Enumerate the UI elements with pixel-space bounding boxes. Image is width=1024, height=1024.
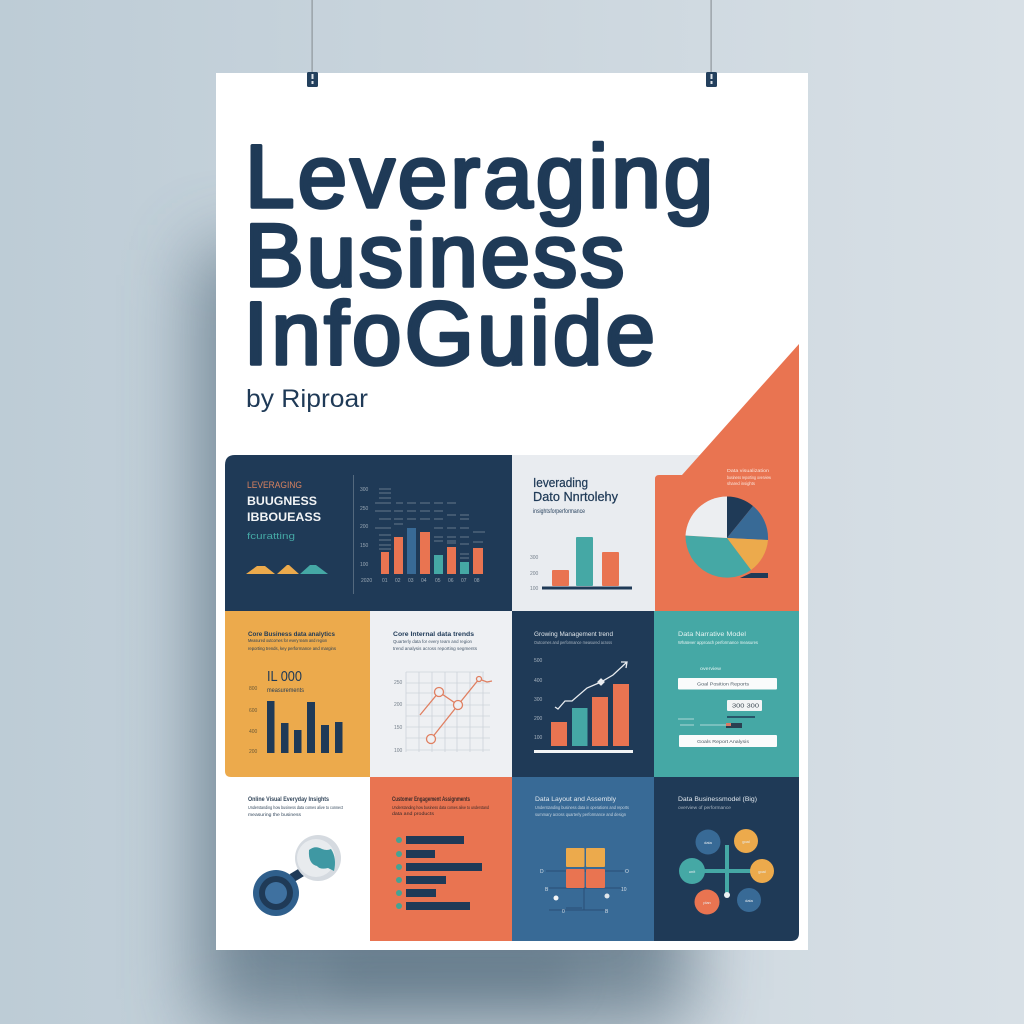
- panel text: [535, 797, 630, 817]
- panel text: reporting trends, key performance and margins: [248, 646, 337, 651]
- matrix diagram: B: [545, 887, 549, 893]
- panel text: [248, 632, 337, 651]
- hub diagram: plan: [703, 900, 711, 905]
- hub diagram: goal: [742, 839, 750, 844]
- input bars: 300 300: [732, 704, 759, 710]
- bar chart: [534, 658, 633, 753]
- bar chart: 400: [249, 729, 258, 735]
- bar chart: 300: [534, 697, 543, 703]
- panel text: [393, 632, 478, 651]
- matrix diagram: 10: [621, 887, 627, 893]
- input bars: [678, 678, 777, 747]
- panel text: Whatever approach performance measures: [678, 640, 759, 645]
- pie caption: [727, 468, 772, 486]
- title: Leveraging: [245, 126, 716, 226]
- magnifier icon: [253, 835, 341, 916]
- panel text: Data Narrative Model: [678, 632, 746, 638]
- bar chart: 400: [534, 678, 543, 684]
- hanging clips: [307, 0, 717, 87]
- matrix diagram: 0: [562, 909, 565, 915]
- panel text: summary across quarterly performance and design: [535, 812, 626, 817]
- panel text: Outcomes and performance measured across: [534, 640, 613, 645]
- bar chart: 03: [408, 578, 414, 584]
- bar chart: 300: [360, 487, 369, 493]
- panel: orange list: [370, 777, 512, 941]
- input bars: Goal Position Reports: [697, 682, 750, 686]
- bar chart: 300: [530, 555, 539, 561]
- trend arrow: [555, 662, 627, 709]
- panel text: [248, 797, 344, 817]
- bar chart: [249, 686, 342, 755]
- number label: measurements: [267, 688, 304, 694]
- line chart: [394, 672, 492, 754]
- panel text: Measured outcomes for every team and region: [248, 638, 327, 643]
- panel: orange pie chart: [655, 344, 799, 611]
- bar chart: 02: [395, 578, 401, 584]
- panel heading: [533, 475, 618, 515]
- panel heading: LEVERAGING: [247, 480, 302, 490]
- panel text: [678, 632, 759, 671]
- panel heading: BUUGNESS: [247, 494, 317, 508]
- bar chart: 150: [360, 543, 369, 549]
- matrix diagram: D: [540, 869, 544, 875]
- panel text: Customer Engagement Assignments: [392, 797, 470, 803]
- title: InfoGuide: [244, 283, 658, 383]
- panel text: data and products: [392, 811, 435, 816]
- panel text: Quarterly data for every team and region: [393, 639, 472, 644]
- panel text: overview: [700, 666, 722, 671]
- panel text: [392, 797, 489, 816]
- bar chart: 100: [530, 586, 539, 592]
- bar chart: 07: [461, 578, 467, 584]
- bar chart: 200: [249, 749, 258, 755]
- pie caption: Data visualization: [727, 468, 770, 473]
- small chart marks: [678, 717, 755, 728]
- panel text: [678, 797, 757, 810]
- panel text: Growing Management trend: [534, 632, 613, 638]
- bar chart: [353, 475, 485, 594]
- bar chart: 2020: [361, 578, 372, 584]
- panel: yellow bar chart: [225, 611, 370, 777]
- pie caption: business reporting overview: [727, 475, 772, 480]
- title: Business: [244, 205, 627, 305]
- panel text: Understanding how business data comes alive to connect: [248, 805, 344, 810]
- panel text: Core Internal data trends: [393, 632, 475, 638]
- panel: line chart: [370, 611, 512, 777]
- panel heading: [247, 480, 321, 542]
- bar chart: 01: [382, 578, 388, 584]
- input bars: Goals Report Analysis: [697, 739, 750, 744]
- bar chart: 06: [448, 578, 454, 584]
- panel text: Online Visual Everyday Insights: [248, 797, 330, 803]
- bar chart: 05: [435, 578, 441, 584]
- byline: by Riproar: [246, 385, 368, 413]
- pie caption: shared insights: [727, 481, 756, 486]
- panel: business overview: [225, 455, 512, 611]
- bar chart: 250: [360, 506, 369, 512]
- panel text: overview of performance: [678, 805, 732, 810]
- bar chart: 500: [534, 658, 543, 664]
- panel heading: Ieverading: [533, 475, 588, 490]
- panel: magnifier: [248, 797, 344, 916]
- panel: teal form: [654, 611, 799, 777]
- matrix diagram: B: [605, 909, 609, 915]
- line chart: 100: [394, 748, 403, 754]
- bar chart: 100: [534, 735, 543, 741]
- pie chart: [685, 496, 768, 578]
- bar chart: 08: [474, 578, 480, 584]
- panel: data narrative background: [512, 455, 702, 611]
- bar chart: 600: [249, 708, 258, 714]
- panel heading: insightsforperformance: [533, 509, 586, 515]
- bar chart: 800: [249, 686, 258, 692]
- panel: navy hub diagram: [654, 777, 799, 941]
- hub diagram: data: [704, 840, 713, 845]
- panel heading: IBBOUEASS: [247, 510, 321, 524]
- panel heading: Dato Nnrtolehy: [533, 489, 618, 504]
- matrix diagram: O: [625, 869, 629, 875]
- panel: blue matrix: [512, 777, 654, 941]
- panel: data narrative: [530, 475, 632, 592]
- list bars: [396, 836, 482, 910]
- panel text: trend analysis across reporting segments: [393, 646, 478, 651]
- hub diagram: goal: [758, 869, 766, 874]
- bar chart: [530, 537, 632, 592]
- panel: growth chart: [512, 611, 654, 777]
- panel heading: fcuratting: [247, 531, 295, 542]
- panel text: Understanding business data in operations and reports: [535, 805, 630, 810]
- panel text: Data Layout and Assembly: [535, 797, 616, 803]
- panel text: [534, 632, 613, 645]
- matrix diagram: [540, 848, 629, 915]
- hub diagram: data: [745, 898, 754, 903]
- line chart: 150: [394, 725, 403, 731]
- line chart: 200: [394, 702, 403, 708]
- hub diagram: unit: [689, 869, 696, 874]
- bar chart: 200: [360, 524, 369, 530]
- bar chart: 200: [534, 716, 543, 722]
- bar chart: 200: [530, 571, 539, 577]
- mountain icons: [246, 565, 328, 574]
- hub diagram: [679, 829, 774, 914]
- panel text: measuring the business: [248, 812, 302, 817]
- bar chart: 04: [421, 578, 427, 584]
- bar chart: 100: [360, 562, 369, 568]
- panel text: Understanding how business data comes alive to understand: [392, 805, 489, 810]
- panel text: Core Business data analytics: [248, 632, 336, 638]
- line chart: 250: [394, 680, 403, 686]
- title: [244, 126, 716, 383]
- poster sheet: [216, 73, 808, 950]
- panel text: Data Businessmodel (Big): [678, 797, 757, 803]
- big number: IL 000: [267, 668, 302, 685]
